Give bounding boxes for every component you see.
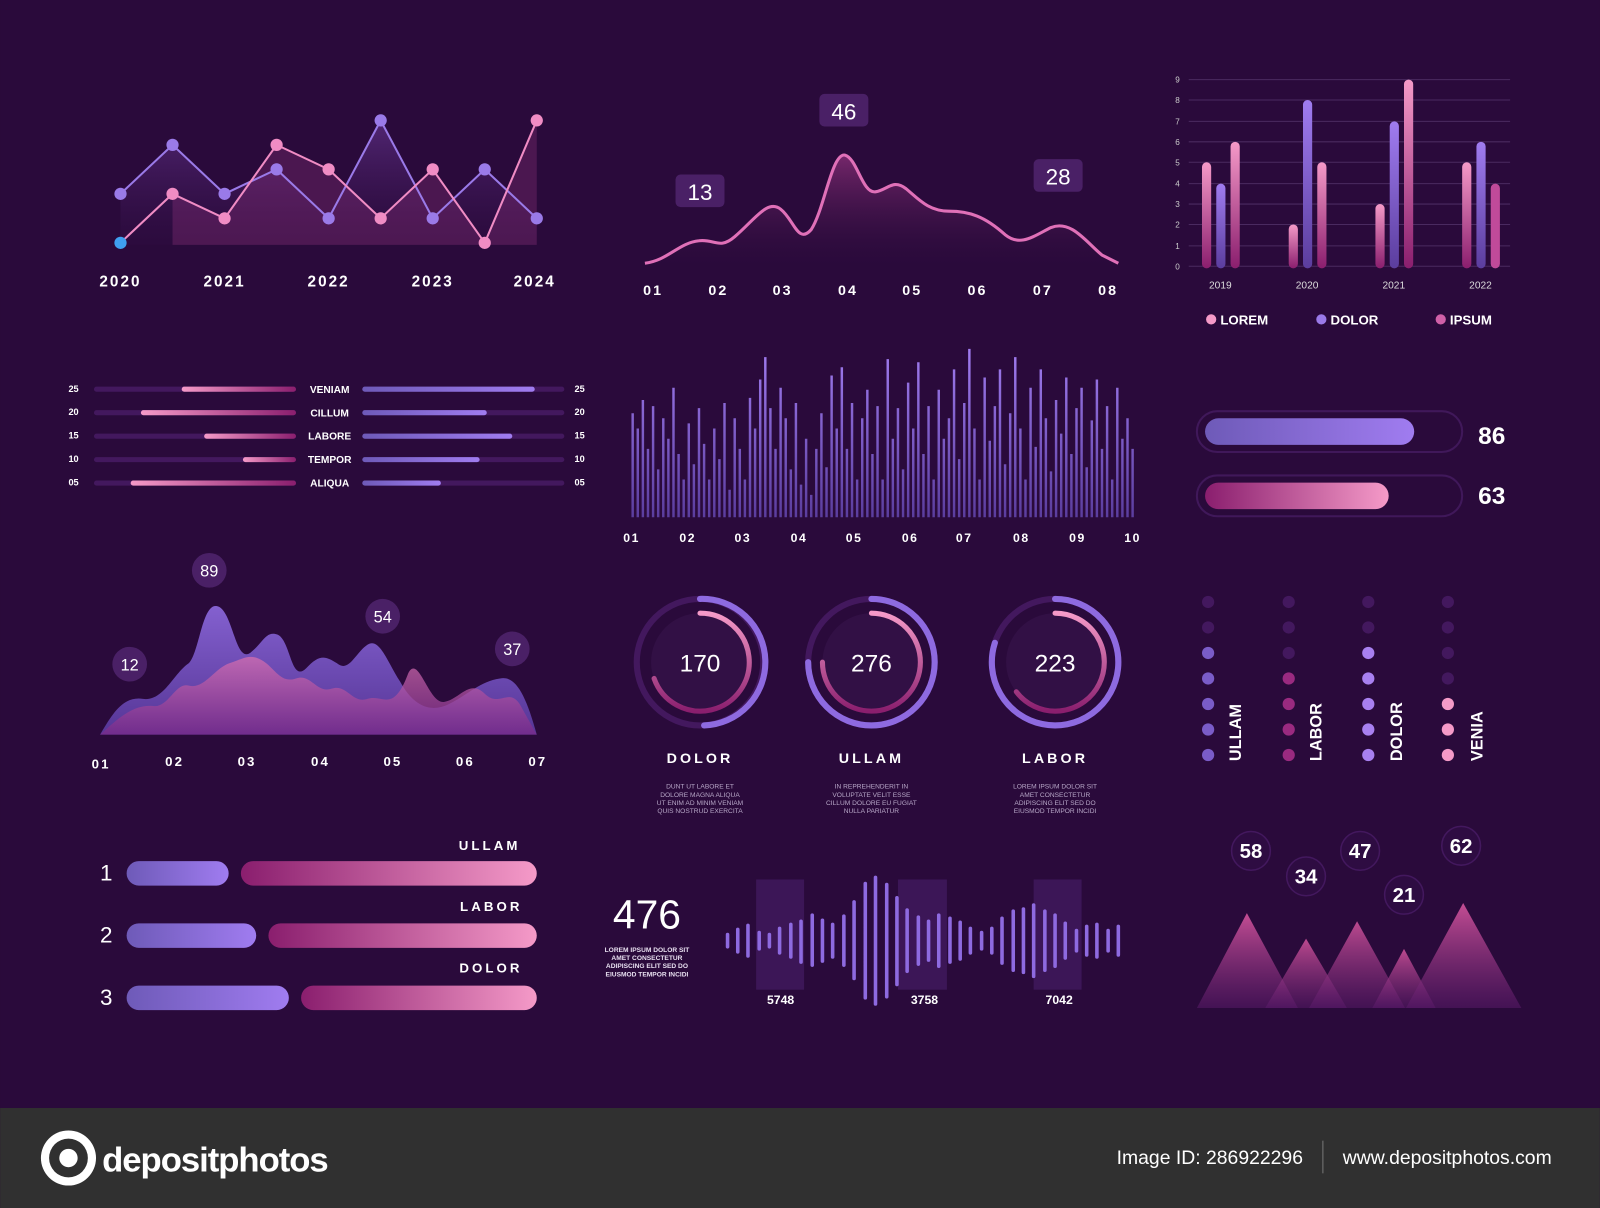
spectrum bar chart: 10 (1124, 531, 1141, 545)
donut: LABOR 223: EIUSMOD TEMPOR INCIDI (1014, 808, 1097, 815)
grouped bar chart: 7 (1175, 117, 1180, 126)
spectrum bar chart: 08 (1013, 531, 1030, 545)
ranked bars: 3 (100, 985, 112, 1010)
donut: ULLAM 276: 276 (851, 650, 892, 677)
donut: DOLOR 170: QUIS NOSTRUD EXERCITA (657, 808, 743, 815)
donut: DOLOR 170: DOLORE MAGNA ALIQUA (660, 792, 740, 799)
donut: ULLAM 276 (808, 599, 935, 815)
ranked bars: 2 (100, 923, 112, 948)
layered area chart: 37 (503, 641, 521, 659)
donut: LABOR 223: LABOR (1022, 751, 1088, 767)
line chart: years: 2022 (308, 274, 350, 291)
grouped bar chart: LOREM (1220, 312, 1268, 327)
line chart: years (99, 114, 556, 291)
footer bar (0, 1108, 1600, 1208)
footer bar: depositphotos (102, 1141, 328, 1179)
mountain chart: 34 (1295, 867, 1318, 889)
waveform with 476: LOREM IPSUM DOLOR SIT (605, 947, 689, 954)
horizontal diverging bars: CILLUM (310, 408, 349, 419)
waveform with 476: 7042 (1046, 993, 1073, 1007)
horizontal diverging bars: ALIQUA (310, 479, 350, 490)
grouped bar chart: DOLOR (1331, 312, 1379, 327)
spectrum bar chart: 02 (679, 531, 696, 545)
grouped bar chart: 3 (1175, 200, 1180, 209)
dot columns (1202, 596, 1487, 761)
wave chart with callouts: 28 (1046, 165, 1071, 190)
grouped bar chart: 1 (1175, 242, 1180, 251)
layered area chart: 06 (456, 754, 475, 769)
wave chart with callouts: 04 (838, 283, 858, 299)
line chart: years: 2021 (203, 274, 246, 291)
grouped bar chart: 6 (1175, 138, 1180, 147)
ranked bars: DOLOR (459, 960, 522, 975)
dot columns: LABOR (1307, 703, 1325, 761)
spectrum bar chart: 03 (735, 531, 751, 545)
donut: DOLOR 170: UT ENIM AD MINIM VENIAM (657, 800, 743, 807)
spectrum bar chart: 01 (623, 531, 640, 545)
horizontal diverging bars: 05 (575, 478, 585, 488)
waveform with 476: 3758 (911, 993, 938, 1007)
grouped bar chart: 2 (1175, 221, 1180, 230)
progress bars 86 / 63: 86 (1478, 423, 1505, 450)
mountain chart: 21 (1393, 885, 1415, 907)
layered area chart: 12 (121, 656, 139, 674)
mountain chart: 62 (1450, 836, 1472, 858)
wave chart with callouts: 08 (1098, 283, 1118, 299)
horizontal diverging bars: TEMPOR (308, 455, 352, 466)
wave chart with callouts: 01 (643, 283, 663, 299)
horizontal diverging bars: VENIAM (310, 385, 349, 396)
layered area chart: 89 (200, 562, 218, 580)
horizontal diverging bars: 20 (68, 407, 79, 417)
grouped bar chart: 2022 (1469, 281, 1492, 292)
ranked bars (100, 838, 537, 1010)
progress bars 86 / 63: 63 (1478, 483, 1505, 510)
footer bar: Image ID: 286922296 (1117, 1147, 1303, 1169)
wave chart with callouts (643, 94, 1118, 299)
dot columns: VENIA (1469, 711, 1487, 761)
wave chart with callouts: 02 (708, 283, 728, 299)
grouped bar chart: 4 (1175, 180, 1180, 189)
line chart: years: 2023 (412, 274, 454, 291)
horizontal diverging bars: 15 (68, 431, 79, 441)
layered area chart: 01 (92, 756, 111, 771)
dot columns: ULLAM (1227, 704, 1245, 761)
layered area chart: 54 (374, 608, 392, 626)
donut: ULLAM 276: CILLUM DOLORE EU FUGIAT (826, 800, 917, 807)
wave chart with callouts: 06 (968, 283, 988, 299)
footer bar: www.depositphotos.com (1342, 1147, 1552, 1169)
horizontal diverging bars: 10 (68, 454, 79, 464)
grouped bar chart: 0 (1175, 262, 1180, 271)
mountain chart: 58 (1240, 841, 1262, 863)
horizontal diverging bars: 10 (575, 454, 585, 464)
spectrum bar chart: 09 (1069, 531, 1086, 545)
grouped bar chart: 2019 (1209, 281, 1232, 292)
donut: LABOR 223: 223 (1035, 650, 1075, 677)
ranked bars: 1 (100, 860, 112, 885)
progress bars 86 / 63 (1197, 411, 1505, 516)
horizontal diverging bars: LABORE (308, 432, 351, 443)
waveform with 476: ADIPISCING ELIT SED DO (606, 963, 688, 970)
mountain chart (1197, 826, 1521, 1008)
donut: ULLAM 276: VOLUPTATE VELIT ESSE (832, 792, 911, 799)
horizontal diverging bars: 20 (575, 407, 585, 417)
grouped bar chart: 8 (1175, 96, 1180, 105)
wave chart with callouts: 46 (831, 99, 856, 124)
grouped bar chart: 2021 (1382, 281, 1405, 292)
waveform with 476 (605, 877, 1118, 1007)
wave chart with callouts: 05 (902, 283, 922, 299)
horizontal diverging bars: 25 (575, 384, 585, 394)
waveform with 476: 5748 (767, 993, 794, 1007)
grouped bar chart: 2020 (1296, 281, 1319, 292)
donut: ULLAM 276: IN REPREHENDERIT IN (835, 784, 908, 791)
horizontal diverging bars: 05 (68, 478, 79, 488)
donut: ULLAM 276: NULLA PARIATUR (844, 808, 899, 815)
wave chart with callouts: 13 (688, 180, 712, 205)
waveform with 476: EIUSMOD TEMPOR INCIDI (606, 971, 689, 978)
grouped bar chart (1175, 76, 1510, 327)
waveform with 476: 476 (613, 891, 681, 937)
dot columns: DOLOR (1388, 702, 1406, 761)
spectrum bar chart: 04 (791, 531, 807, 545)
grouped bar chart: 9 (1175, 76, 1180, 85)
grouped bar chart: 5 (1175, 158, 1180, 167)
ranked bars: LABOR (460, 899, 522, 914)
layered area chart: 07 (528, 754, 547, 769)
ranked bars: ULLAM (459, 838, 520, 853)
layered area chart (92, 553, 547, 771)
mountain chart: 47 (1349, 841, 1371, 863)
donut: LABOR 223: AMET CONSECTETUR (1020, 792, 1091, 799)
donut: DOLOR 170: DUNT UT LABORE ET (666, 784, 734, 791)
donut: DOLOR 170 (637, 599, 765, 815)
spectrum bar chart (623, 349, 1141, 545)
layered area chart: 03 (238, 754, 256, 769)
spectrum bar chart: 07 (956, 531, 973, 545)
waveform with 476: AMET CONSECTETUR (611, 955, 683, 962)
wave chart with callouts: 07 (1033, 283, 1053, 299)
wave chart with callouts: 03 (773, 283, 793, 299)
spectrum bar chart: 06 (902, 531, 919, 545)
donut: ULLAM 276: ULLAM (839, 751, 904, 767)
donut: LABOR 223: LOREM IPSUM DOLOR SIT (1013, 784, 1097, 791)
layered area chart: 02 (165, 754, 184, 769)
donut: DOLOR 170: 170 (680, 650, 720, 677)
donut: LABOR 223: ADIPISCING ELIT SED DO (1014, 800, 1096, 807)
horizontal diverging bars: 25 (68, 384, 79, 394)
horizontal diverging bars (68, 384, 585, 490)
line chart: years: 2024 (514, 274, 556, 291)
horizontal diverging bars: 15 (575, 431, 585, 441)
spectrum bar chart: 05 (846, 531, 862, 545)
grouped bar chart: IPSUM (1450, 312, 1492, 327)
donut: DOLOR 170: DOLOR (667, 751, 733, 767)
layered area chart: 04 (311, 754, 330, 769)
line chart: years: 2020 (99, 274, 142, 291)
donut: LABOR 223 (992, 599, 1118, 815)
layered area chart: 05 (383, 754, 402, 769)
